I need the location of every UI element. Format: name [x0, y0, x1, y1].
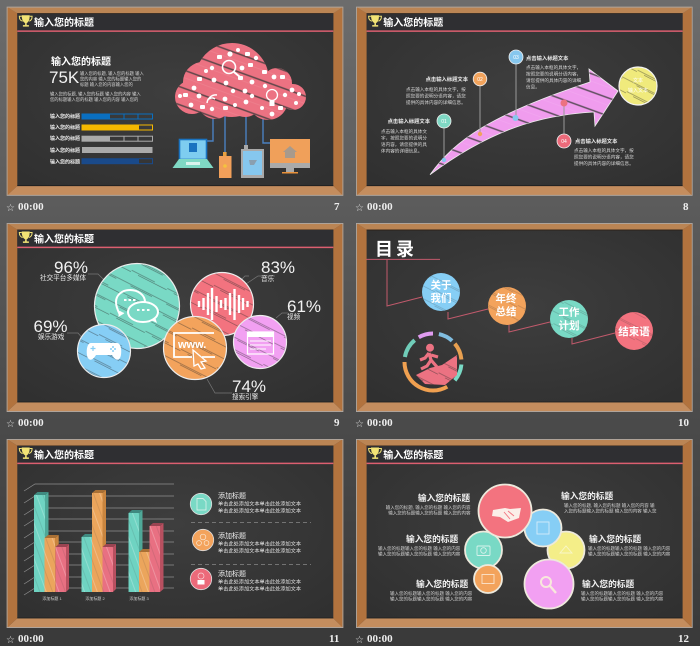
icon: phone: [219, 152, 232, 178]
heading: slide 7 title: 输入您的标题: [34, 16, 94, 29]
label: 83%: 83%: [261, 258, 295, 277]
heading: slide 11 title: 输入您的标题: [34, 448, 94, 462]
label: 96%: [40, 258, 88, 282]
callout: 02: 02: [477, 77, 483, 83]
text: middle right: 输入您的标题输入您的标题 输入您的内容: [588, 545, 671, 552]
bubble: red handshake: [478, 484, 532, 538]
callout: 04: 提供的具体内容的详细信息。: [574, 160, 634, 167]
footer: slide 9: ☆: [6, 419, 15, 430]
text: middle right: 输入您的标题输入您的标题 输入您的内容: [588, 550, 671, 558]
callout: 03: 03: [513, 55, 519, 61]
bar: group 2: [82, 490, 116, 592]
footer: slide 10: 10: [678, 417, 690, 429]
wires: [207, 107, 270, 155]
label: 74%: 74%: [232, 377, 266, 396]
node: about us: 关于: [430, 278, 452, 292]
text: top right: 输入您的标题: [561, 490, 613, 501]
bubble: video: [234, 316, 286, 368]
footer: slide 11: ☆: [6, 635, 15, 646]
chart: progress bars: [50, 113, 152, 166]
chart: 3D bars: [24, 484, 174, 601]
callout: 01: 点击输入标题文本: [388, 117, 431, 125]
list item 2: 单击此处添加文本单击此处添加文本: [218, 546, 301, 554]
icon: yellow target circle: [619, 67, 657, 105]
node: about us: [422, 273, 460, 311]
label: 96%: 社交平台多媒体: [40, 273, 87, 282]
footer: slide 12: [355, 633, 690, 646]
chart: 3D bars: 添加标题 1: [42, 595, 62, 601]
label: 74%: 搜索引擎: [232, 392, 259, 401]
icon: laptop: [172, 140, 214, 168]
list item 1: 单击此处添加文本单击此处添加文本: [218, 500, 301, 508]
node: work plan: 工作: [558, 306, 580, 318]
divider: [191, 522, 311, 564]
node: work plan: 计划: [558, 319, 580, 332]
callout: 04: 04: [561, 139, 567, 145]
icon: tablet: [241, 145, 264, 178]
connector lines: [366, 259, 615, 344]
footer: slide 7: ☆: [6, 203, 15, 214]
list item 1: 添加标题: [218, 491, 246, 500]
text: middle left: 输入您的标题输入您的标题 输入您的内容: [378, 550, 461, 558]
text: bottom right: 输入您的标题: [582, 578, 634, 589]
callout: 02: 点击输入本框的具体文字，按: [406, 86, 466, 93]
bubble: social media: [94, 264, 180, 348]
footer: slide 12: 12: [678, 633, 690, 645]
text: middle left: [378, 533, 461, 558]
list item 3: 单击此处添加文本单击此处添加文本: [218, 584, 301, 592]
text: middle left: 输入您的标题: [406, 533, 458, 544]
text: middle right: 输入您的标题: [589, 533, 641, 544]
icon: yellow target circle: 文本: [633, 77, 643, 84]
label: 61%: 61%: [287, 297, 321, 316]
panel: slide 12 circles: [355, 439, 693, 646]
callout: 02: 照您要的说明分语内容，请您: [406, 92, 466, 100]
icon: cloud: [175, 43, 306, 120]
text: bottom left: [390, 578, 473, 602]
footer: slide 9: [6, 417, 340, 430]
label: 96%: 96%: [54, 258, 88, 277]
list item 3: [190, 568, 301, 592]
node: year-end summary: 年终: [496, 292, 517, 305]
bar: group 1: [34, 492, 69, 592]
bubble: search: www.: [177, 339, 206, 351]
chart: progress bars: 输入您的标题: [50, 147, 80, 154]
callout: 04: [557, 100, 634, 167]
icon: monitor: [270, 139, 310, 174]
leader lines: [67, 274, 288, 393]
footer: slide 11: [6, 633, 339, 646]
heading: slide 12 title: 输入您的标题: [383, 448, 443, 462]
list item 3: 添加标题: [218, 569, 246, 578]
node: work plan: [550, 300, 588, 338]
chart: progress bars: 输入您的标题: [50, 158, 80, 166]
callout: 01: 01: [441, 119, 447, 125]
text block: intro: 您的标题输入您的标题 输入您的内容 输入您的: [50, 96, 138, 103]
footer: slide 9: 9: [334, 417, 340, 429]
heading: slide 9 title: 输入您的标题: [34, 232, 94, 246]
footer: slide 7: [6, 201, 340, 214]
callout: 03: 按照您要的说明分语内容，: [526, 70, 581, 78]
callout: 01: 字，按照您要的说明分: [381, 134, 427, 142]
callout: 04: 照您要的说明分语内容，请您: [574, 154, 634, 160]
panel: slide 7 cloud: [6, 7, 343, 214]
callout: 01: 点击输入本框的具体文: [381, 128, 427, 135]
label: 69%: 娱乐游戏: [38, 332, 65, 341]
callout: 03: 请您提供的具体内容的详细: [526, 77, 582, 84]
callout: 02: 点击输入标题文本: [426, 75, 469, 83]
chart: progress bars: 输入您的标题: [50, 124, 80, 131]
callout: 02: [406, 72, 487, 136]
footer: slide 8: ☆: [355, 203, 364, 214]
text block: intro: [49, 55, 144, 103]
panel: slide 11 chart: [6, 439, 343, 646]
text block: intro: 您的内容 输入您的标题输入您的: [80, 76, 141, 82]
list item 2: [192, 529, 301, 554]
icon: runner ring: [404, 334, 461, 391]
callout: 03: 点击输入标题文本: [526, 54, 569, 62]
text block: intro: 75K: [49, 68, 80, 87]
text block: intro: 输入您的标题, 输入您的标题 输入: [80, 70, 144, 77]
node: closing: 结束语: [618, 325, 650, 338]
bubble: blue chart: [524, 510, 562, 546]
text: bottom right: 输入您的标题输入您的标题 输入您的内容: [581, 596, 664, 602]
callout: 01: 语内容，请您提供的具: [381, 141, 427, 148]
callout: 04: 点击输入标题文本: [575, 137, 618, 145]
footer: slide 10: [355, 417, 690, 430]
text block: intro: 输入您的标题: [51, 55, 111, 68]
callout: 04: 点击输入本框的具体文字，按: [574, 147, 634, 154]
list item 2: 添加标题: [218, 531, 246, 540]
text: bottom left: 输入您的标题: [416, 578, 468, 589]
footer: slide 11: 11: [329, 633, 339, 645]
panel: slide 8 arrow: [355, 7, 693, 214]
list item 1: [190, 491, 301, 515]
label: 61%: 视频: [287, 312, 301, 321]
text: top left: [386, 492, 471, 516]
node: about us: 我们: [430, 292, 452, 304]
chart: progress bars: 输入您的标题: [50, 113, 80, 120]
bubble: violet search: [524, 560, 574, 608]
callout: 03: 信息。: [526, 84, 540, 90]
footer: slide 8: 8: [683, 201, 689, 213]
footer: slide 7: 00:00: [18, 201, 44, 213]
text: top left: 输入您的标题输入您的标题 输入您的内容: [388, 510, 471, 516]
callout: 03: 点击输入本框的具体文字，: [526, 64, 581, 71]
footer: slide 12: 00:00: [367, 633, 393, 645]
panel: slide 10 contents: [355, 223, 693, 430]
text block: intro: 输入您的标题, 输入您的标题 输入您的内容 输入: [50, 90, 141, 98]
node: year-end summary: 总结: [496, 305, 517, 318]
heading: contents: 目录: [375, 240, 417, 260]
text: middle right: [588, 533, 671, 558]
text: top right: [561, 490, 657, 514]
list item 1: 单击此处添加文本单击此处添加文本: [218, 506, 301, 514]
bubble: teal camera: [465, 532, 502, 568]
heading: slide 8 title: 输入您的标题: [383, 16, 443, 29]
chart: 3D bars: 添加标题 3: [129, 595, 149, 601]
footer: slide 10: 00:00: [367, 417, 393, 429]
text: bottom right: 输入您的标题输入您的标题 输入您的内容: [581, 590, 664, 597]
text: top right: 入您的标题输入您的标题 输入您的内容 输入您: [564, 508, 657, 514]
callout: 01: 体内容的详细信息。: [381, 148, 422, 154]
label: 83%: 音乐: [261, 274, 275, 283]
text: top left: 输入您的标题, 输入您的标题 输入您的内容: [386, 504, 471, 511]
bar: group 3: [128, 510, 164, 592]
text block: intro: 标题 输入您的内容输入您的: [80, 81, 133, 88]
footer: slide 9: 00:00: [18, 417, 44, 429]
node: year-end summary: [488, 287, 526, 325]
footer: slide 10: ☆: [355, 419, 364, 430]
chart: 3D bars: 添加标题 2: [85, 595, 105, 601]
footer: slide 12: ☆: [355, 635, 364, 646]
callout: 03: [509, 50, 582, 121]
list item 3: 单击此处添加文本单击此处添加文本: [218, 578, 301, 586]
text: bottom left: 输入您的标题输入您的标题 输入您的内容: [390, 596, 473, 602]
list item 2: 单击此处添加文本单击此处添加文本: [218, 540, 301, 548]
bubble: search: [164, 316, 226, 380]
icon: yellow target circle: 输入文本: [628, 87, 648, 94]
bubble: games: [78, 324, 130, 378]
text: top right: 输入您的标题, 输入您的标题 输入您的内容 输: [564, 502, 655, 509]
node: closing: [615, 312, 653, 350]
bubble: yellow: [548, 532, 584, 568]
bubble: music: [190, 272, 254, 336]
callout: 02: 提供的具体内容的详细信息。: [406, 99, 466, 106]
text: bottom right: [581, 578, 664, 602]
label: 69%: 69%: [34, 317, 68, 336]
footer: slide 7: 7: [334, 201, 340, 213]
text: top left: 输入您的标题: [418, 492, 470, 503]
footer: slide 11: 00:00: [18, 633, 44, 645]
footer: slide 8: 00:00: [367, 201, 393, 213]
bubble: orange tablet: [474, 565, 502, 593]
footer: slide 8: [355, 201, 689, 214]
chart: progress bars: 输入您的标题: [50, 135, 80, 142]
panel: slide 9 bubbles: [6, 223, 343, 430]
text: middle left: 输入您的标题输入您的标题 输入您的内容: [378, 545, 461, 552]
arrow: growth: [430, 69, 618, 175]
callout: 01: [381, 114, 451, 162]
text: bottom left: 输入您的标题输入您的标题 输入您的内容: [390, 590, 473, 597]
